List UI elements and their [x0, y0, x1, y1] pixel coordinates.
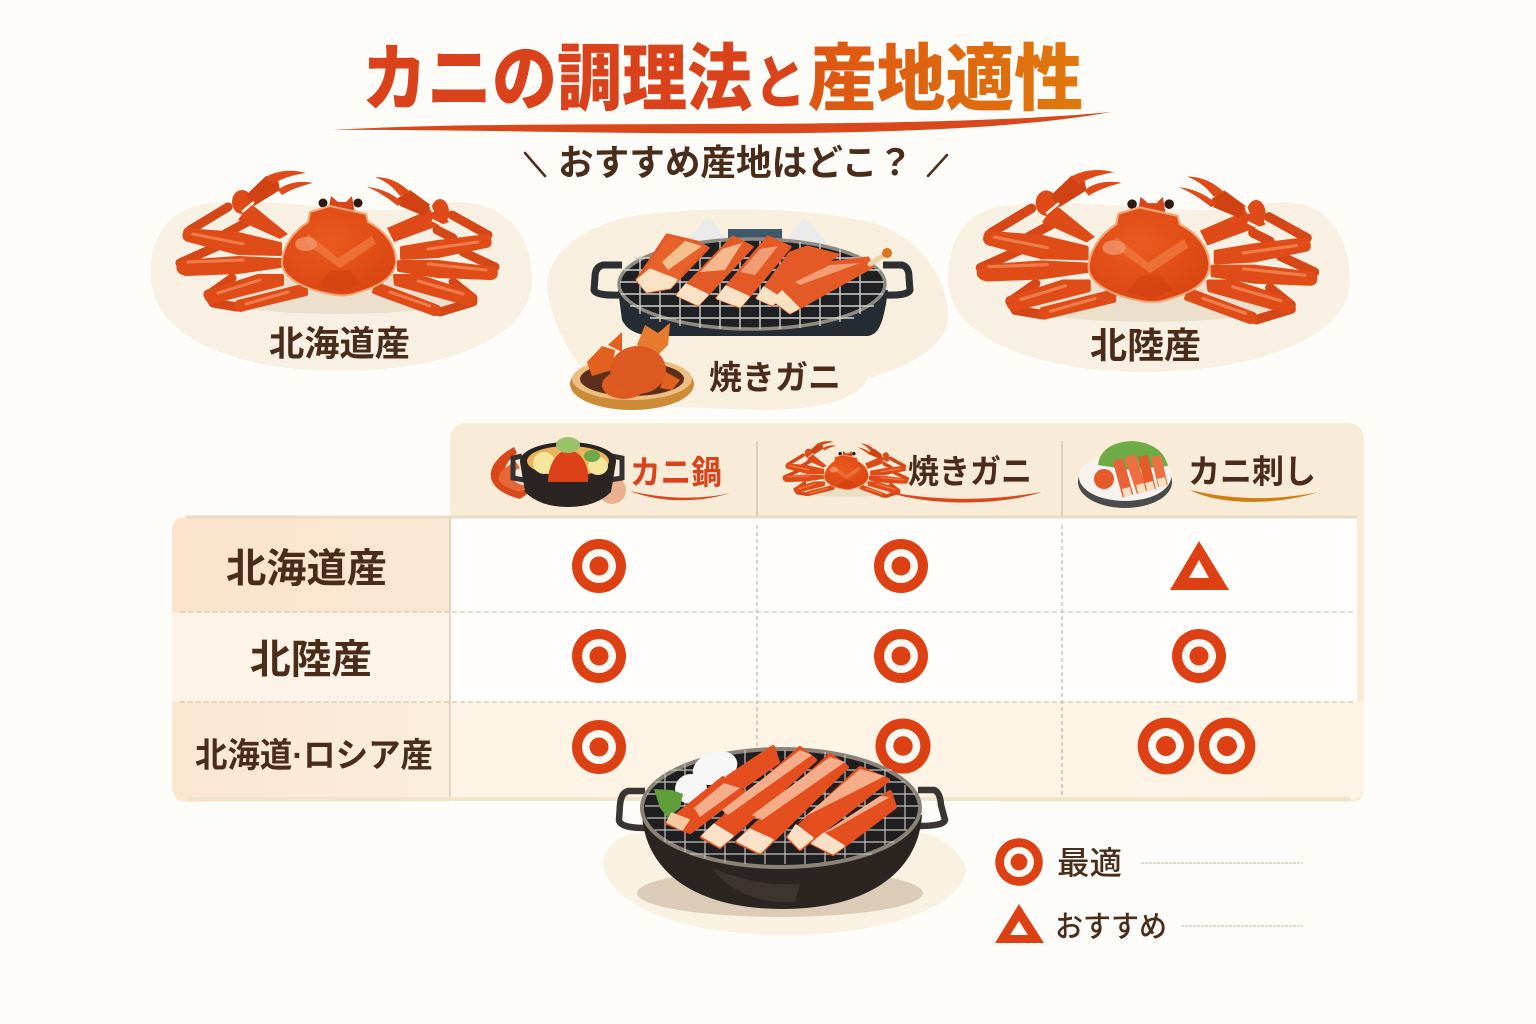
title: カニの調理法	[362, 39, 752, 120]
column header: crab sashimi	[1078, 441, 1318, 508]
pot shadow	[637, 869, 923, 917]
label: 焼きガニ	[709, 359, 841, 396]
label: 焼きガニ	[908, 453, 1032, 490]
title underline swoosh	[333, 112, 1111, 133]
icon: crab	[784, 441, 908, 497]
rating: Hokuriku / sashimi	[1172, 629, 1226, 683]
icon: double circle	[995, 838, 1043, 886]
blob background	[948, 202, 1350, 372]
icon: triangle	[995, 904, 1044, 943]
panel: Hokkaido crab	[151, 171, 532, 371]
rim and grate	[642, 749, 920, 867]
row label: Hokkaido: 北海道産	[226, 547, 387, 591]
legend: best	[995, 838, 1303, 886]
rating: Hokkaido / sashimi triangle	[1170, 541, 1229, 590]
label: 北海道産	[269, 325, 410, 364]
plate blob	[603, 833, 966, 935]
underline	[888, 492, 1042, 502]
rating: Hokkaido-Russia / hot pot	[572, 720, 626, 774]
label: 北陸産	[1090, 325, 1201, 366]
title: 産地適性	[808, 39, 1083, 120]
label: おすすめ	[1055, 911, 1167, 944]
rating: Hokkaido / hot pot	[572, 539, 626, 593]
illustration: large grill pot	[603, 745, 966, 935]
subtitle: おすすめ産地はどこ？	[558, 142, 913, 183]
crab legs	[667, 747, 895, 854]
garnish	[654, 789, 683, 818]
rating: Hokuriku / grilled	[874, 629, 928, 683]
panel: grilled crab	[547, 209, 948, 410]
rating: Hokkaido-Russia / grilled	[875, 718, 931, 774]
icon: grill pot	[594, 221, 910, 336]
header background	[450, 423, 1364, 802]
icon: crab	[979, 170, 1315, 322]
grid cells: bottom row	[450, 702, 1364, 799]
legend: recommended	[995, 904, 1303, 944]
icon: swirl	[598, 476, 626, 504]
column header: grilled crab	[784, 441, 1042, 502]
grid cells: upper rows	[450, 517, 1357, 702]
row label: Hokkaido background	[172, 517, 450, 612]
underline	[630, 491, 730, 500]
underline	[1190, 490, 1318, 502]
column header: crab hot pot	[491, 437, 730, 507]
label: カニ鍋	[630, 454, 722, 491]
label: 最適	[1057, 845, 1122, 881]
crab legs	[637, 235, 872, 313]
icon: crab	[178, 171, 496, 314]
rice balls	[688, 745, 742, 791]
row label: Hokuriku: 北陸産	[250, 638, 372, 682]
pot body	[642, 815, 922, 909]
label: カニ刺し	[1188, 453, 1316, 490]
title: と	[754, 51, 806, 116]
icon: hot pot	[513, 437, 622, 507]
blob background	[151, 202, 532, 371]
row label: Hokkaido-Russia background	[172, 702, 450, 802]
rating: Hokkaido-Russia / sashimi pair	[1138, 718, 1255, 774]
blob background	[547, 209, 948, 410]
icon: small crab dish	[570, 323, 694, 410]
table	[172, 423, 1364, 802]
panel: Hokuriku crab	[948, 170, 1350, 372]
row label: Hokkaido-Russia: 北海道·ロシア産	[195, 737, 433, 775]
handles	[619, 791, 645, 828]
title	[362, 39, 1083, 120]
rating: Hokkaido / grilled	[874, 539, 928, 593]
rating: Hokuriku / hot pot	[572, 629, 626, 683]
icon: sashimi plate	[1078, 441, 1172, 508]
row label: Hokuriku background	[172, 612, 450, 702]
